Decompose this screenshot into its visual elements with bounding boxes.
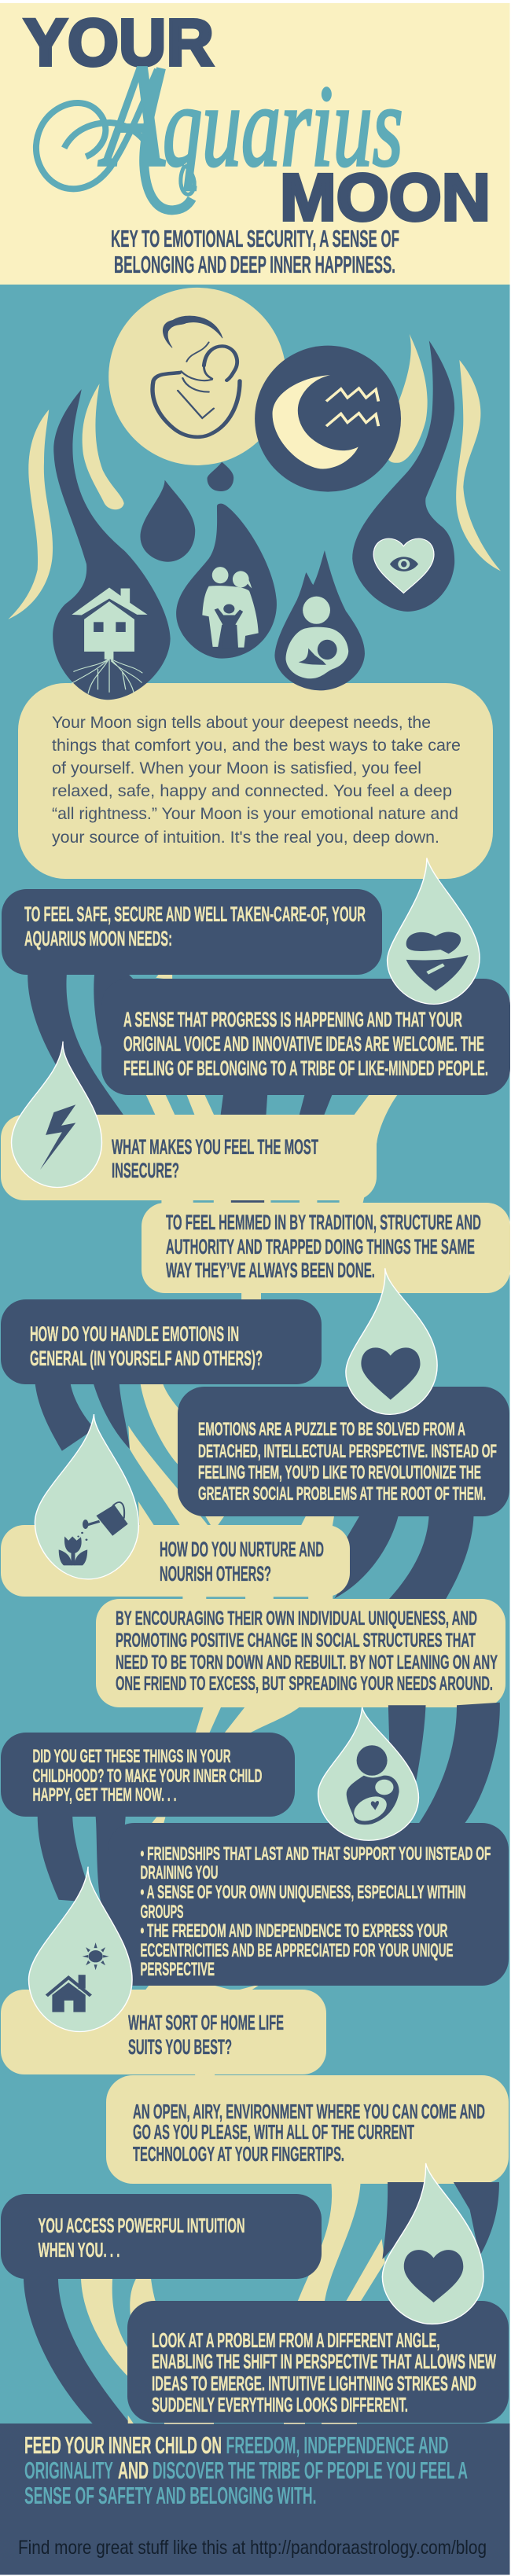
- drop: watering can: [35, 1414, 138, 1579]
- box: friendships list: [108, 1823, 509, 1986]
- drop: breastfeeding: [274, 550, 365, 690]
- connector strands: [35, 1292, 474, 1600]
- box: you access powerful intuition: YOU ACCESS POWERFUL INTUITION: [38, 2214, 245, 2237]
- box: friendships list: DRAINING YOU: [140, 1862, 219, 1883]
- drop: blank: [140, 480, 195, 562]
- drop: mother and baby: [318, 1707, 418, 1840]
- hero illustration: moon and flames: [8, 288, 501, 700]
- title: Aquarius script: A: [98, 33, 165, 197]
- box: did you get these things: HAPPY, GET THEM NOW. . .: [33, 1784, 176, 1806]
- section: needs: [1, 858, 510, 1293]
- box: to feel safe: AQUARIUS MOON NEEDS:: [24, 927, 172, 950]
- flame: left sand: [8, 410, 53, 619]
- footer message: FEED YOUR INNER CHILD ON: [24, 2431, 222, 2459]
- connector strands: [24, 2182, 499, 2424]
- subtitle: [111, 225, 399, 278]
- panel: intro text: your source of intuition. It's the real you, deep down.: [52, 829, 439, 847]
- drop: heart: [346, 1268, 437, 1414]
- flame: heart eye: [352, 340, 454, 612]
- footer message: AND: [118, 2457, 149, 2484]
- box: how do you handle emotions: GENERAL (IN YOURSELF AND OTHERS)?: [30, 1347, 263, 1370]
- section: emotions: [1, 1268, 509, 1707]
- box: nurture question: NOURISH OTHERS?: [160, 1562, 271, 1586]
- box: how do you handle emotions: HOW DO YOU HANDLE EMOTIONS IN: [30, 1322, 239, 1346]
- box: you access powerful intuition: [1, 2194, 322, 2279]
- box: did you get these things: DID YOU GET THESE THINGS IN YOUR: [33, 1746, 231, 1767]
- panel: intro text: [18, 683, 493, 879]
- flame: second sand: [83, 384, 124, 509]
- drop: family: [176, 504, 277, 659]
- footer message: [24, 2431, 468, 2509]
- box: insecure question: WHAT MAKES YOU FEEL THE MOST: [112, 1135, 318, 1159]
- panel: intro text: relaxed, safe, happy and connected. You feel a deep: [52, 782, 452, 800]
- panel: title banner: [0, 3, 509, 285]
- title: Aquarius script: quarius: [163, 62, 403, 191]
- drop: heart: [382, 2163, 483, 2324]
- box: you access powerful intuition: WHEN YOU. . .: [38, 2238, 119, 2262]
- box: emotions are a puzzle: [178, 1387, 509, 1516]
- box: did you get these things: [1, 1733, 295, 1817]
- drop: heart hug: [388, 858, 480, 1004]
- circle: navy moon: [255, 346, 401, 492]
- box: to feel safe: [2, 889, 382, 975]
- icon: nursing mother: [286, 597, 348, 678]
- box: sense of progress: [101, 979, 510, 1095]
- box: open airy environment: [106, 2075, 509, 2184]
- box: friendships list: GROUPS: [140, 1902, 184, 1923]
- box: how do you handle emotions: [1, 1299, 322, 1384]
- panel: intro text: “all rightness.” Your Moon is your emotional nature and: [52, 805, 458, 823]
- section: intuition: [1, 2163, 509, 2424]
- circle: sand mother: [108, 288, 286, 465]
- icon: aquarius glyph: [326, 388, 378, 426]
- box: home life question: [1, 1990, 326, 2074]
- icon: heart with eye: [373, 538, 434, 593]
- box: hemmed in: [142, 1203, 510, 1293]
- panel: intro text: things that comfort you, and the best ways to take care: [52, 737, 461, 755]
- box: nurture question: [1, 1525, 350, 1597]
- icon: mother and child: [153, 316, 240, 437]
- icon: crescent moon: [273, 375, 358, 469]
- box: by encouraging: [96, 1599, 505, 1707]
- drop: small under circle: [208, 462, 233, 491]
- box: did you get these things: CHILDHOOD? TO MAKE YOUR INNER CHILD: [33, 1766, 263, 1787]
- box: insecure question: [1, 1115, 377, 1200]
- panel: intro text: Your Moon sign tells about your deepest needs, the: [52, 714, 431, 732]
- panel: footer: [0, 2423, 509, 2575]
- connector strands: [28, 972, 399, 1206]
- title: Moon: MOON: [280, 160, 491, 234]
- box: nurture question: HOW DO YOU NURTURE AND: [160, 1538, 324, 1561]
- title: Your: YOUR: [24, 6, 214, 79]
- flame: right sand: [456, 360, 501, 571]
- connector strands: [38, 1703, 500, 2078]
- drop: home and sun: [29, 1867, 132, 2032]
- box: home life question: WHAT SORT OF HOME LIFE: [128, 2011, 284, 2034]
- box: look at a problem: [127, 2301, 509, 2423]
- box: insecure question: INSECURE?: [112, 1159, 179, 1182]
- box: open airy environment: TECHNOLOGY AT YOUR FINGERTIPS.: [133, 2142, 344, 2166]
- drop: lightning: [12, 1042, 101, 1188]
- section: childhood and home: [1, 1703, 509, 2184]
- icon: family: [202, 567, 259, 649]
- box: home life question: SUITS YOU BEST?: [128, 2035, 232, 2059]
- box: friendships list: PERSPECTIVE: [140, 1959, 215, 1980]
- flame: house: [53, 389, 171, 700]
- panel: intro text: of yourself. When your Moon is satisfied, you feel: [52, 759, 421, 777]
- flame: center sand: [388, 334, 428, 463]
- footer message: ORIGINALITY: [24, 2457, 113, 2484]
- title: Aquarius script: [36, 33, 403, 210]
- icon: rooted house: [70, 587, 148, 694]
